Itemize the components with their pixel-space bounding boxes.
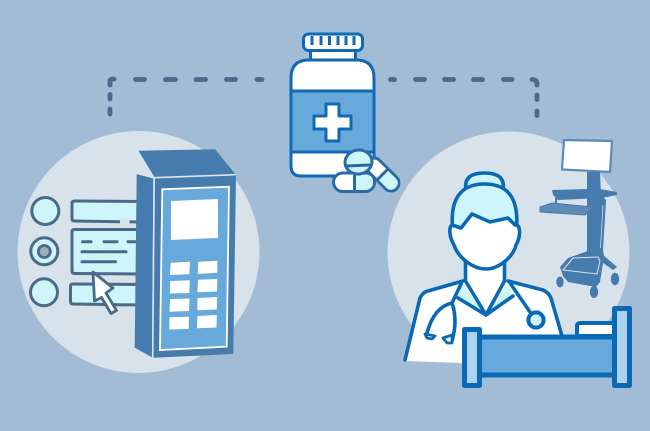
bottle neck <box>310 50 356 60</box>
stethoscope tube <box>427 283 530 341</box>
stethoscope tips <box>425 334 452 343</box>
icon: infusion pump device <box>135 149 236 358</box>
option bar 1 <box>72 201 140 222</box>
face <box>450 214 520 269</box>
hair bun <box>466 173 503 190</box>
cart wheels <box>556 273 619 298</box>
cart strut highlight <box>600 205 603 248</box>
pump front <box>154 176 236 358</box>
pillow <box>577 323 614 336</box>
gap in first bar <box>120 218 130 224</box>
figure: nurse <box>405 173 562 363</box>
radio option 3 <box>30 279 58 306</box>
hair <box>452 184 517 228</box>
pump left side <box>135 174 153 357</box>
pump screen <box>171 199 218 240</box>
cart keyboard <box>540 198 593 215</box>
bottle cap <box>304 34 362 50</box>
capsule bottom <box>334 173 374 192</box>
pump top <box>138 149 236 178</box>
option bar 3 <box>70 284 140 305</box>
cart shelf <box>552 189 617 200</box>
icon: cursor arrow <box>93 272 116 314</box>
stethoscope chestpiece <box>528 312 544 328</box>
collar right <box>486 284 514 315</box>
pump panel <box>160 187 229 350</box>
cart base outline <box>563 257 600 274</box>
cart monitor <box>562 140 612 172</box>
radio option 2 selected <box>31 238 58 265</box>
medical cross <box>314 104 351 141</box>
panel: left circle <box>18 131 260 373</box>
round pill <box>343 148 374 176</box>
icon: computer cart <box>540 140 619 298</box>
coat outline <box>405 281 562 360</box>
bottle body <box>291 60 374 176</box>
radio option 1 <box>32 198 59 224</box>
collar left <box>458 284 486 315</box>
bed side <box>478 337 615 375</box>
icon: selection form <box>30 198 140 306</box>
bed headboard <box>614 308 630 386</box>
icon: medicine bottle <box>291 34 374 176</box>
cart base <box>560 250 617 287</box>
pump keypad <box>169 261 217 330</box>
option panel 2 <box>72 230 140 274</box>
bed footboard <box>464 330 480 386</box>
bottle label <box>291 91 374 152</box>
dashed connector: right <box>390 80 537 116</box>
icon: hospital bed <box>464 308 630 386</box>
capsule right <box>363 155 402 194</box>
dashed connector: left <box>110 79 262 114</box>
coat <box>405 281 562 363</box>
icon: pills <box>334 148 402 194</box>
cart pole <box>585 172 606 256</box>
neck <box>466 262 504 315</box>
panel: right circle <box>388 132 630 374</box>
